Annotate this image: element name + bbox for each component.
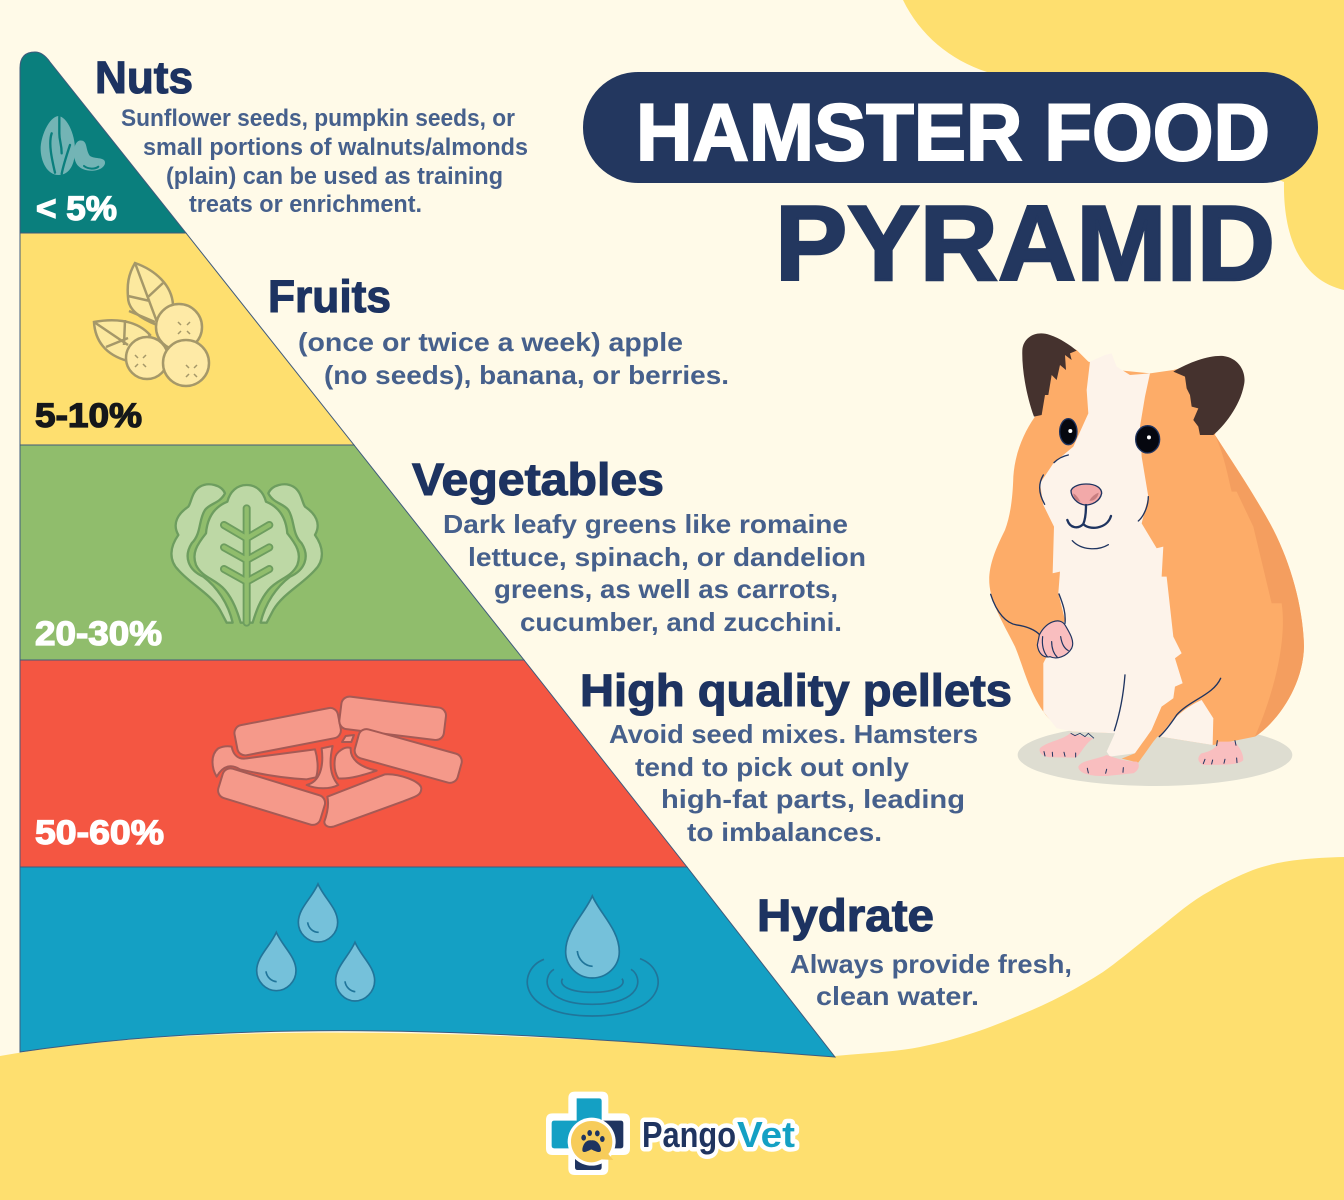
body: hydrate: clean water.: [816, 981, 979, 1011]
body: hydrate: [790, 949, 1072, 1011]
text block: nuts: [95, 52, 528, 218]
body: fruits: [298, 327, 729, 390]
logo wordmark: Pango: [642, 1114, 736, 1155]
body: nuts: treats or enrichment.: [189, 191, 422, 218]
background blob: top right: [903, 0, 1344, 290]
body: pellets: to imbalances.: [687, 817, 882, 847]
logo wordmark accent: Vet: [737, 1114, 795, 1155]
body: hydrate: Always provide fresh,: [790, 949, 1072, 979]
body: vegetables: greens, as well as carrots,: [494, 574, 838, 604]
text block: hydrate: [757, 890, 1072, 1011]
text block: vegetables: [412, 454, 866, 637]
icon: water drops: [257, 884, 658, 1016]
tier: water: [20, 867, 835, 1057]
food pyramid: [20, 52, 835, 1057]
front paw: [1037, 621, 1073, 658]
title: [583, 72, 1318, 303]
title line two: PYRAMID: [775, 183, 1275, 303]
body: vegetables: cucumber, and zucchini.: [520, 607, 842, 637]
mouth and fur lines: [991, 455, 1221, 737]
body: nuts: [121, 105, 528, 218]
logo mark: [546, 1092, 630, 1175]
eyes: [1060, 419, 1160, 453]
tier: pellets: [20, 660, 687, 867]
body: pellets: Avoid seed mixes. Hamsters: [609, 719, 978, 749]
body: nuts: Sunflower seeds, pumpkin seeds, or: [121, 105, 515, 132]
body: pellets: high-fat parts, leading: [661, 784, 965, 814]
label: 5 to 10 percent: 5-10%: [35, 397, 142, 435]
tier: nuts: [20, 52, 186, 233]
body: fruits: (no seeds), banana, or berries.: [324, 360, 729, 390]
heading: nuts: Nuts: [95, 52, 193, 103]
left ear: [1022, 333, 1077, 417]
gap between legs: [1160, 700, 1213, 745]
title pill: [583, 72, 1318, 183]
text block: pellets: [580, 665, 1012, 847]
logo: PangoVet: [546, 1092, 795, 1175]
label: 50 to 60 percent: 50-60%: [35, 814, 164, 852]
body: vegetables: Dark leafy greens like romaine: [443, 509, 848, 539]
heading: hydrate: Hydrate: [757, 890, 934, 941]
text block: fruits: [268, 271, 729, 390]
label: 20 to 30 percent: 20-30%: [35, 615, 162, 653]
icon: fruits: [94, 263, 209, 386]
body: pellets: [609, 719, 978, 847]
body: nuts: (plain) can be used as training: [166, 163, 503, 190]
heading: pellets: High quality pellets: [580, 665, 1012, 716]
nose: [1071, 484, 1102, 505]
body: nuts: small portions of walnuts/almonds: [143, 134, 528, 161]
icon: lettuce: [171, 484, 322, 623]
body: vegetables: [443, 509, 866, 637]
icon: nuts: [41, 116, 105, 175]
heading: vegetables: Vegetables: [412, 454, 664, 505]
illustration: hamster: [989, 333, 1304, 786]
heading: fruits: Fruits: [268, 271, 391, 322]
title line one: HAMSTER FOOD: [636, 88, 1270, 178]
back feet: [1040, 733, 1243, 776]
icon: pellets: [212, 696, 464, 827]
belly and face: [1040, 353, 1183, 757]
label: under 5 percent: < 5%: [36, 190, 117, 228]
tier: vegetables: [20, 445, 524, 660]
body shading: [1215, 435, 1304, 737]
tier: fruits: [20, 233, 354, 445]
body: fruits: (once or twice a week) apple: [298, 327, 683, 357]
right ear: [1173, 356, 1245, 435]
body: [989, 337, 1304, 745]
body: vegetables: lettuce, spinach, or dandelion: [468, 542, 866, 572]
front leg: [1122, 687, 1217, 763]
background blob: bottom wave: [0, 857, 1344, 1200]
body: pellets: tend to pick out only: [635, 752, 910, 782]
ground shadow: [1018, 724, 1292, 786]
